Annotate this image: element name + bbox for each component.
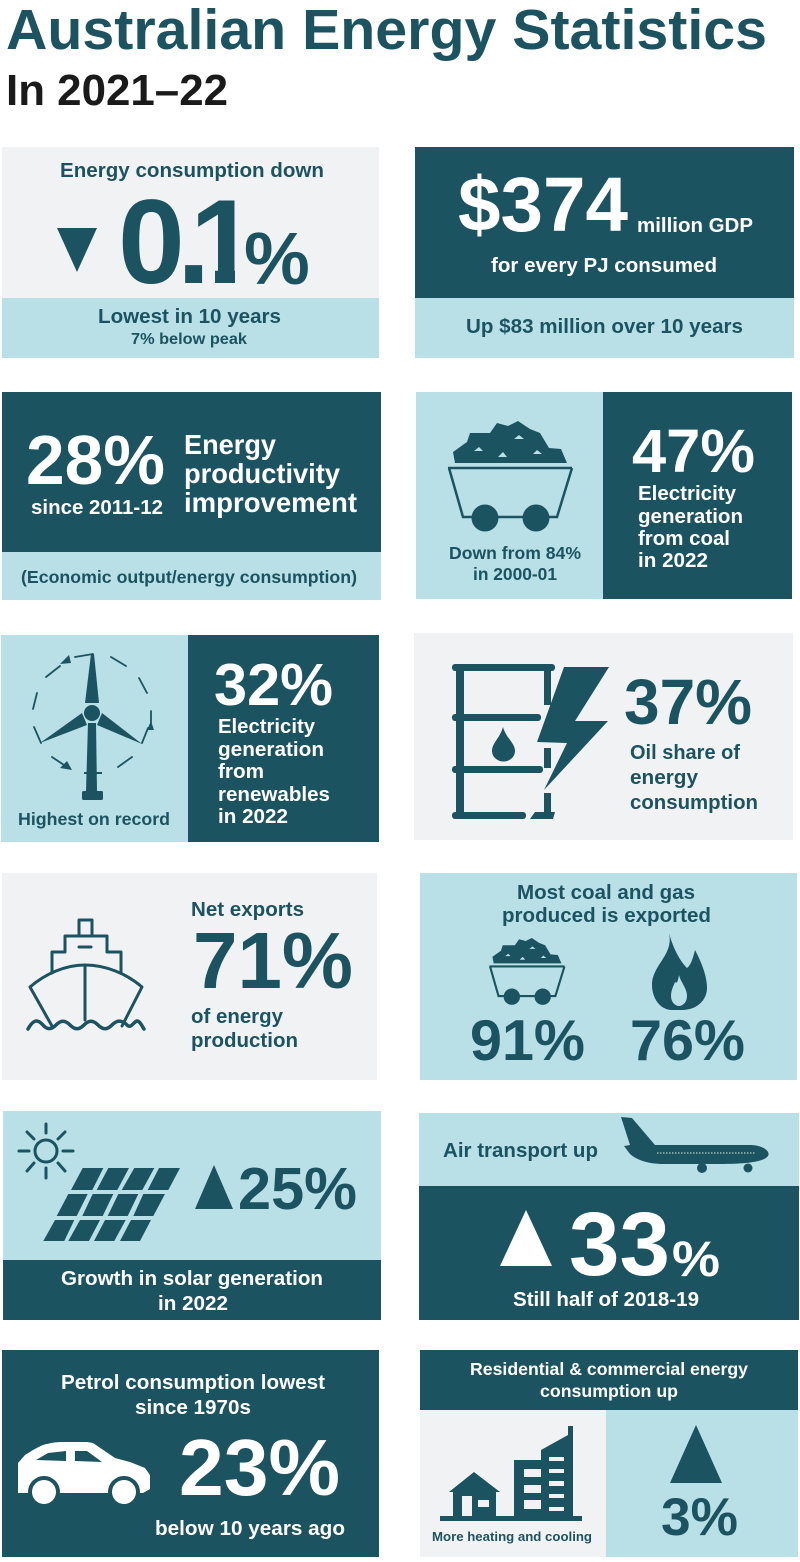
label: renewables [218, 783, 330, 806]
heading: Residential & commercial energy [470, 1359, 748, 1379]
label bottom: production [191, 1029, 298, 1052]
icon: house and building [440, 1426, 582, 1521]
icon: ship [28, 920, 144, 1029]
heading: since 1970s [135, 1396, 251, 1419]
panel: oil share [414, 633, 793, 840]
label: energy [630, 766, 699, 789]
heading: Energy consumption down [60, 159, 324, 182]
label bottom: of energy [191, 1005, 284, 1028]
label: from [218, 760, 264, 783]
stat: 23%: 23% [179, 1423, 340, 1512]
caption: Highest on record [18, 809, 170, 829]
panel: renewables [1, 635, 379, 842]
caption: Up $83 million over 10 years [466, 315, 743, 338]
title: In 2021–22 [6, 66, 228, 115]
caption: in 2022 [158, 1292, 228, 1315]
heading: produced is exported [502, 904, 711, 927]
stat: 47%: 47% [632, 417, 755, 486]
stat label: for every PJ consumed [491, 254, 717, 277]
stat: 0.1% [122, 199, 308, 284]
label: in 2022 [218, 805, 288, 828]
stat label [491, 214, 753, 277]
icon: up triangle [500, 1210, 552, 1266]
panel: coal and gas exports [420, 873, 797, 1080]
icon: sun [19, 1124, 73, 1178]
label [630, 741, 758, 814]
label: Electricity [218, 715, 316, 738]
stat: 32%: 32% [214, 651, 333, 718]
icon: coal cart [448, 421, 572, 532]
stat: 3%: 3% [661, 1488, 738, 1547]
icon: up triangle [670, 1425, 722, 1483]
stat: 76%: 76% [630, 1009, 745, 1073]
icon: solar panels [43, 1168, 180, 1241]
caption: in 2000-01 [473, 564, 557, 584]
stat: $374: $374 [458, 162, 628, 248]
caption: Down from 84% [449, 543, 581, 563]
panel: energy consumption down [2, 147, 379, 358]
stat: 0.1%: % [244, 217, 310, 300]
stat: 71%: 71% [193, 916, 353, 1005]
label [218, 715, 330, 828]
panel: residential and commercial [420, 1350, 798, 1557]
heading: consumption up [540, 1381, 678, 1401]
stat label: million GDP [637, 214, 753, 237]
panel: net exports [2, 873, 377, 1080]
stat: 0.1%: 1 [190, 175, 257, 309]
label bottom [191, 1005, 298, 1052]
panel: GDP per PJ [415, 147, 794, 358]
icon: car [18, 1442, 150, 1508]
heading [470, 1359, 748, 1401]
icon: down triangle [57, 228, 97, 272]
panel: petrol consumption [2, 1350, 379, 1557]
label: generation [218, 738, 324, 761]
icon: up triangle [195, 1165, 233, 1209]
stat: 33%: 33 [569, 1195, 670, 1295]
caption: below 10 years ago [155, 1517, 345, 1540]
panel: coal electricity [416, 392, 792, 599]
heading [502, 881, 711, 927]
stat: 37%: 37% [624, 666, 752, 738]
panel: energy productivity [2, 392, 381, 600]
label: from coal [638, 527, 730, 550]
heading: Air transport up [443, 1139, 598, 1162]
panel: air transport [419, 1113, 799, 1320]
heading: Most coal and gas [517, 881, 695, 904]
icon: gas flame [652, 933, 707, 1010]
label: in 2022 [638, 549, 708, 572]
caption: More heating and cooling [432, 1529, 592, 1544]
caption: 7% below peak [131, 331, 247, 348]
caption: Still half of 2018-19 [513, 1288, 699, 1311]
stat: 28%: 28% [26, 421, 165, 499]
stat: 28%: since 2011-12 [31, 497, 163, 519]
label: Oil share of [630, 741, 740, 764]
stat: 33%: % [672, 1231, 720, 1287]
caption: Lowest in 10 years [98, 305, 281, 328]
icon: coal cart small [489, 938, 564, 1005]
label: productivity [184, 458, 341, 489]
label: consumption [630, 791, 758, 814]
icon: wind turbine [33, 654, 154, 800]
label [638, 482, 743, 572]
label: Electricity [638, 482, 737, 505]
label: improvement [184, 487, 357, 518]
caption [449, 543, 581, 584]
caption [98, 305, 281, 348]
label top: Net exports [191, 898, 304, 921]
label: Energy [184, 429, 277, 460]
icon: oil barrel with lightning [452, 664, 609, 819]
label: generation [638, 505, 743, 528]
label [184, 429, 357, 518]
caption [61, 1267, 323, 1315]
stat: 25%: 25% [238, 1155, 357, 1222]
stat: 33% [569, 1195, 720, 1295]
heading: Petrol consumption lowest [61, 1371, 325, 1394]
title [6, 0, 767, 115]
heading [61, 1371, 325, 1419]
stat: 0.1%: 0. [118, 175, 210, 309]
panel: solar generation [3, 1111, 381, 1320]
stat: 91%: 91% [470, 1009, 585, 1073]
caption: Growth in solar generation [61, 1267, 323, 1290]
icon: plane [621, 1117, 769, 1173]
caption: (Economic output/energy consumption) [21, 567, 357, 587]
